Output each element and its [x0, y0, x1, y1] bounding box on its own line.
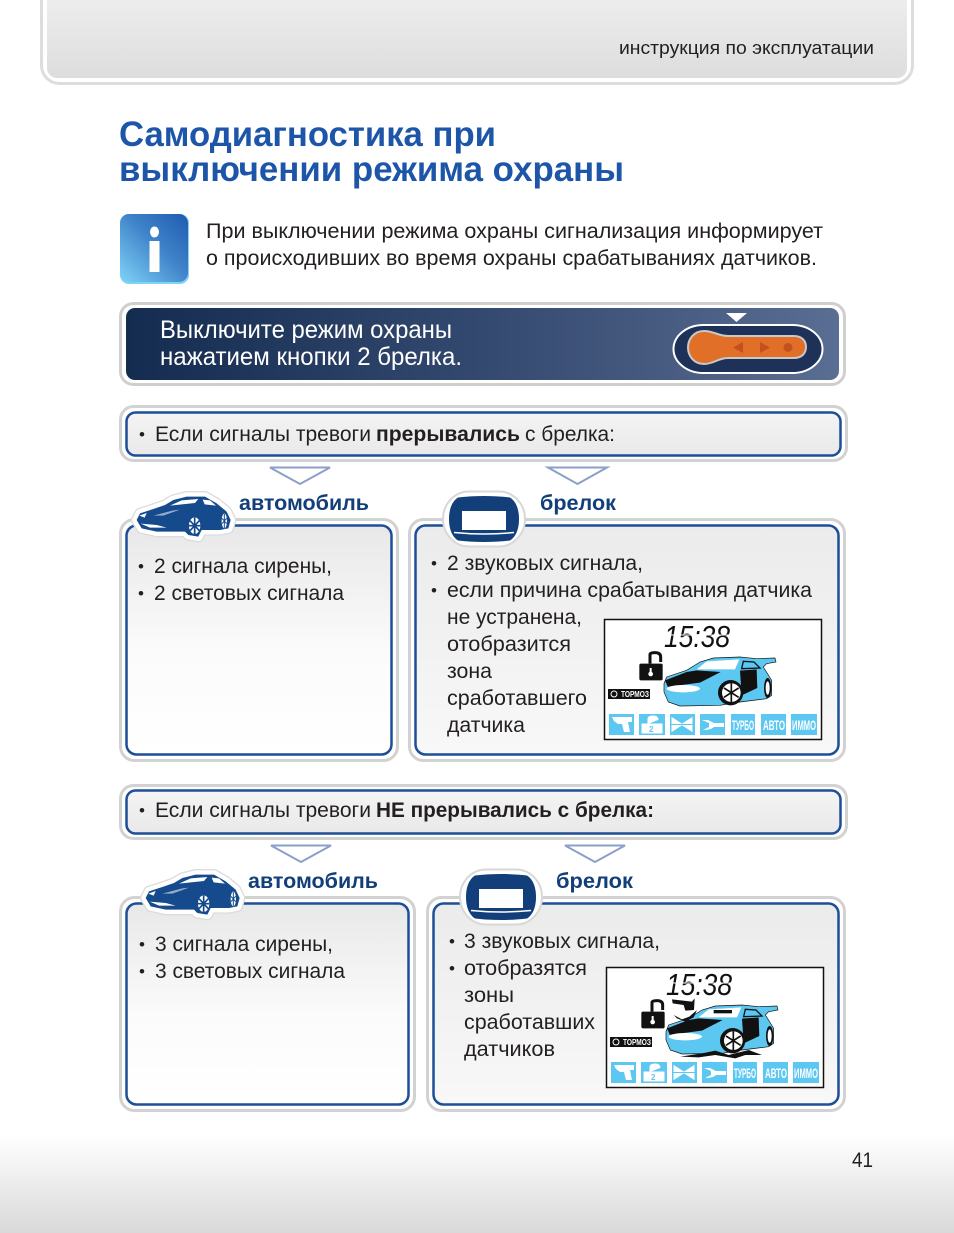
condition bar 2: НЕ прерывались с брелка: [376, 799, 654, 822]
intro text: При выключении режима охраны сигнализация информирует [206, 219, 823, 243]
heading: car: автомобиль [248, 870, 378, 893]
page number: 41 [852, 1149, 873, 1172]
list: fob signals: датчика [447, 714, 525, 737]
list: fob signals: • [449, 932, 455, 951]
condition bar 1: прерывались [376, 423, 520, 446]
LCD display 2 [606, 967, 824, 1088]
arrow: to car 2 [271, 846, 331, 862]
list: fob signals: зона [447, 660, 492, 683]
LCD display 2: 2 [651, 1073, 656, 1082]
list: fob signals [431, 552, 812, 737]
list: fob signals: сработавших [464, 1011, 596, 1034]
footer gradient band [0, 1135, 954, 1233]
list: fob signals [449, 930, 660, 1061]
condition bar 1: • [139, 425, 145, 444]
list: fob signals: зоны [464, 984, 514, 1007]
panel: fob, interrupted [410, 492, 844, 760]
list: car signals: 3 световых сигнала [155, 960, 345, 983]
banner: switch off [120, 304, 844, 384]
LCD display 2: ТОРМОЗ [623, 1038, 651, 1047]
banner text: Выключите режим охраны [160, 316, 452, 344]
LCD display 2: ИММО [794, 1065, 818, 1081]
list: fob signals: не устранена, [447, 606, 582, 629]
list: car signals: 2 световых сигнала [154, 582, 344, 605]
LCD display 2: ТУРБО [734, 1065, 756, 1081]
condition bar 2 [120, 786, 846, 838]
list: car signals [138, 555, 344, 605]
header caption: инструкция по эксплуатации [619, 38, 874, 58]
LCD display 1: 2 [649, 725, 654, 734]
list: fob signals: • [431, 581, 437, 600]
LCD display 1: ТУРБО [732, 717, 754, 733]
LCD display 1: ТОРМОЗ [621, 690, 649, 699]
list: car signals: 3 сигнала сирены, [155, 933, 333, 956]
LCD display 1 [604, 619, 822, 740]
condition bar 1: Если сигналы тревоги [155, 423, 371, 446]
panel: fob, not interrupted [428, 870, 844, 1110]
icon: key fob button [674, 313, 822, 373]
condition bar 1 [120, 406, 846, 460]
list: car signals: • [138, 557, 144, 576]
intro text [206, 219, 823, 270]
list: fob signals: • [449, 959, 455, 978]
list: car signals: 2 сигнала сирены, [154, 555, 332, 578]
list: fob signals: датчиков [464, 1038, 555, 1061]
list: car signals: • [139, 935, 145, 954]
icon: fob [460, 870, 542, 924]
title [119, 115, 624, 189]
arrow: to fob 2 [565, 846, 625, 862]
list: car signals: • [139, 962, 145, 981]
condition bar 2: • [139, 801, 145, 820]
LCD display 1: АВТО [763, 717, 785, 733]
banner text [160, 316, 462, 371]
banner text: нажатием кнопки 2 брелка. [160, 343, 462, 371]
list: car signals: • [138, 584, 144, 603]
list: fob signals: отобразятся [464, 957, 587, 980]
arrow: to fob 1 [548, 468, 607, 484]
heading: fob: брелок [540, 492, 616, 515]
header panel [42, 0, 912, 84]
panel: car, not interrupted [120, 870, 414, 1110]
title: Самодиагностика при [119, 115, 496, 154]
icon: car [137, 497, 231, 537]
LCD display 2: АВТО [765, 1065, 787, 1081]
LCD display 2: 15:38 [666, 967, 733, 1002]
icon: info [120, 214, 189, 284]
icon: fob [443, 492, 525, 546]
list: car signals [139, 933, 345, 983]
title: выключении режима охраны [119, 150, 624, 189]
LCD display 1: 15:38 [664, 619, 731, 654]
list: fob signals: если причина срабатывания датчика [447, 579, 812, 602]
list: fob signals: 3 звуковых сигнала, [464, 930, 660, 953]
arrow: to car 1 [270, 468, 330, 484]
icon: car [146, 875, 240, 915]
LCD display 1: ИММО [792, 717, 816, 733]
intro text: о происходивших во время охраны срабатываниях датчиков. [206, 246, 817, 270]
list: fob signals: сработавшего [447, 687, 587, 710]
list: fob signals: • [431, 554, 437, 573]
heading: car: автомобиль [239, 492, 369, 515]
heading: fob: брелок [556, 870, 633, 893]
panel: car, interrupted [120, 492, 398, 760]
condition bar 1: с брелка: [525, 423, 615, 446]
list: fob signals: отобразится [447, 633, 571, 656]
condition bar 2: Если сигналы тревоги [155, 799, 371, 822]
list: fob signals: 2 звуковых сигнала, [447, 552, 643, 575]
